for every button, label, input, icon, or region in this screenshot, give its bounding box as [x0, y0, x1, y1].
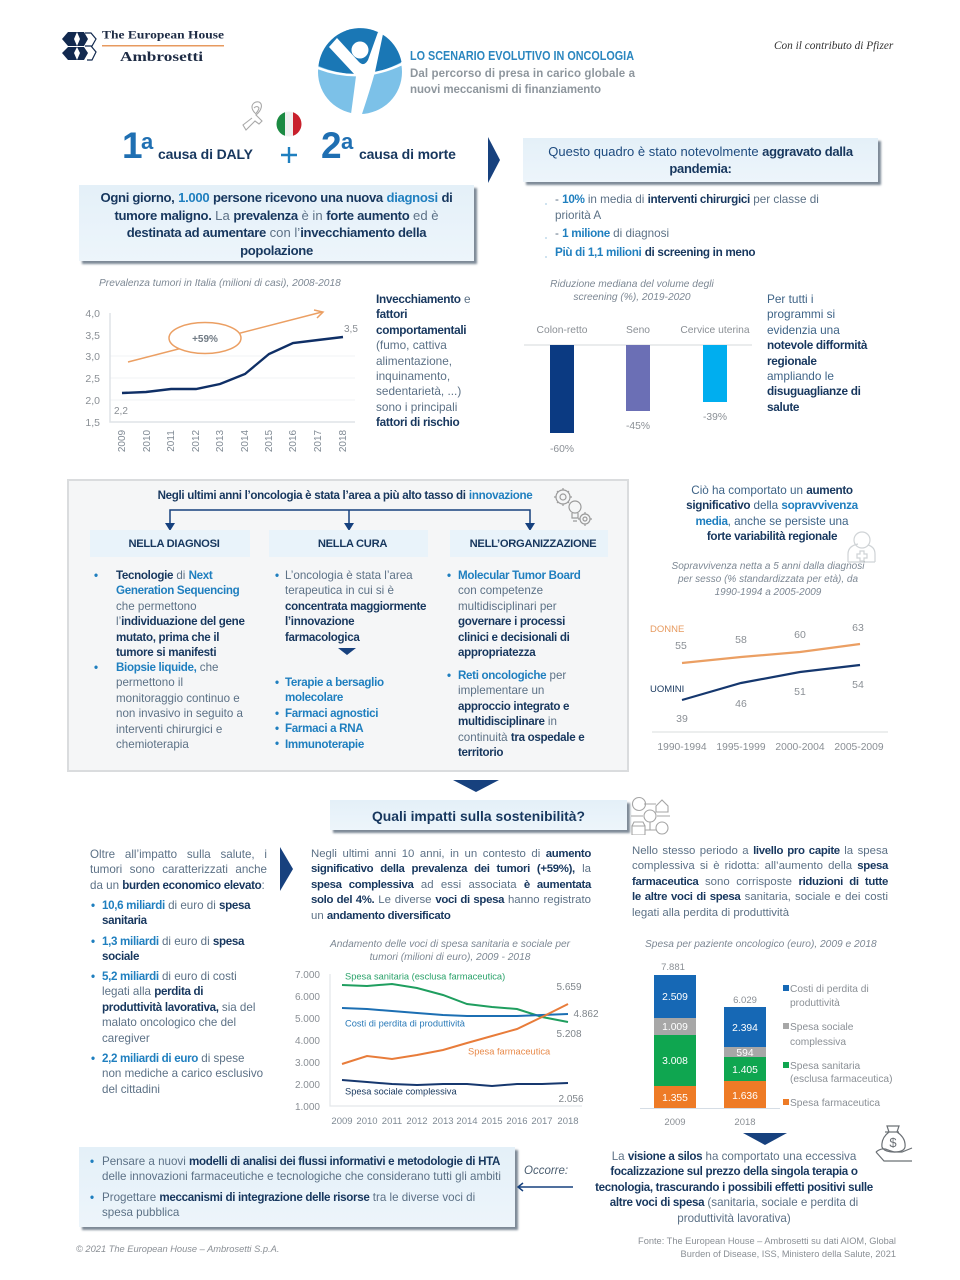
stat: second cause of death: 2 — [321, 125, 341, 166]
legend: Spesa sanitaria — [790, 1061, 861, 1072]
column: organizzazione: governare i processi — [458, 615, 565, 628]
column: organizzazione: • — [447, 669, 451, 682]
column: organizzazione: multidisciplinare in — [458, 715, 557, 728]
list: burden items: • — [91, 970, 95, 983]
panel: what is needed: Progettare meccanismi di integrazione delle risorse tra le diverse voci di — [102, 1191, 475, 1204]
column header: organizzazione: NELL’ORGANIZZAZIONE — [470, 538, 596, 550]
caption: survival chart: 1990-1994 a 2005-2009 — [715, 587, 821, 598]
chart: spending lines: Spesa sanitaria (esclusa farmaceutica) — [345, 972, 505, 982]
chart: per-patient stacked bars: 1.355 — [662, 1093, 688, 1104]
column: cura: terapeutica in cui si è — [285, 584, 394, 597]
stat: first cause of DALY: causa di DALY — [158, 146, 253, 162]
text: risk factors: comportamentali — [376, 323, 466, 337]
list: burden items: sanitaria — [102, 914, 147, 927]
column: organizzazione — [447, 569, 584, 759]
chart: prevalence line chart: 2012 — [191, 429, 202, 452]
text: risk factors: fattori — [376, 307, 407, 321]
chart: spending lines: 2018 — [557, 1116, 579, 1127]
chart: spending lines: 2016 — [506, 1116, 528, 1127]
chart: prevalence line chart: 2018 — [338, 429, 349, 452]
chart: spending lines: 1.000 — [295, 1102, 320, 1113]
panel: pandemic callout — [523, 138, 878, 182]
chart: prevalence line chart: 2,2 — [114, 406, 128, 417]
chart: per-patient stacked bars: 6.029 — [733, 995, 757, 1006]
chart: survival by sex: 54 — [852, 679, 864, 691]
chart: survival by sex: 39 — [676, 713, 688, 725]
panel: what is needed: • — [90, 1191, 94, 1204]
chart: prevalence line chart: 2013 — [215, 429, 226, 452]
stat: second cause of death: causa di morte — [359, 146, 456, 162]
panel: what is needed: spesa pubblica — [102, 1206, 179, 1219]
text: survival statement: media, anche se persiste una — [695, 515, 849, 528]
text: spending trend — [311, 848, 592, 922]
column: cura: Terapie a bersaglio — [285, 676, 384, 689]
list: burden items: 2,2 miliardi di euro di spese — [102, 1052, 244, 1065]
chart: spending lines: 2013 — [432, 1116, 454, 1127]
text: survival statement: Ciò ha comportato un aumento — [691, 484, 853, 497]
column: cura: Farmaci a RNA — [285, 722, 363, 735]
panel: daily diagnoses callout: tumore maligno. La prevalenza è in forte aumento ed è — [114, 208, 439, 222]
column: organizzazione: continuità tra ospedale e — [458, 731, 584, 744]
column: organizzazione: • — [447, 569, 451, 582]
chart: survival by sex: 46 — [735, 698, 747, 710]
column: diagnosi: permettono il — [116, 676, 183, 689]
chart: per-patient stacked bars: 2018 — [734, 1117, 756, 1128]
text: spending trend: un andamento diversificato — [311, 910, 451, 922]
text: risk factors: inquinamento, — [376, 369, 450, 383]
heading: sustainability question — [330, 800, 627, 830]
text: regional differences: disuguaglianze di — [767, 384, 861, 398]
column header: cura: NELLA CURA — [318, 538, 387, 550]
column: diagnosi: interventi chirurgici e — [116, 723, 222, 736]
chart: spending lines: 4.000 — [295, 1036, 320, 1047]
column: diagnosi: Biopsie liquide, che — [116, 661, 218, 674]
chart: prevalence line chart: 2014 — [240, 429, 251, 452]
text: per capita spending: le altre voci di spesa sanitaria, sociale e dei costi — [632, 891, 888, 903]
chart: spending lines: 2015 — [481, 1116, 503, 1127]
text: silos vision — [595, 1150, 873, 1225]
chart: per-patient stacked bars: 2.509 — [662, 992, 688, 1003]
panel: daily diagnoses callout: Ogni giorno, 1.000 persone ricevono una nuova diagnosi di — [101, 190, 452, 205]
title: report heading: Dal percorso di presa in carico globale a — [410, 68, 636, 80]
column: diagnosi: • — [94, 569, 98, 582]
text: per capita spending: Nello stesso periodo a livello pro capite la spesa — [632, 845, 888, 857]
column: diagnosi: Tecnologie di Next — [116, 569, 212, 582]
text: regional differences: Per tutti i — [767, 292, 814, 306]
text: risk factors: sedentarietà, ...) — [376, 384, 461, 398]
column: diagnosi: che permettono — [116, 600, 197, 613]
list: burden items: caregiver — [102, 1032, 150, 1045]
chart: spending lines — [295, 970, 599, 1127]
chart: spending lines: Costi di perdita di produttività — [345, 1018, 466, 1028]
chart: spending lines: 3.000 — [295, 1058, 320, 1069]
column: cura: farmacologica — [285, 631, 359, 644]
list: burden items: sociale — [102, 950, 139, 963]
chart: survival by sex: 2000-2004 — [775, 742, 825, 753]
chart: screening reduction bars — [524, 325, 752, 455]
text: regional differences: evidenzia una — [767, 323, 840, 337]
column: cura: • — [275, 569, 279, 582]
label: Occorre: Occorre: — [524, 1165, 568, 1177]
column: organizzazione: implementare un — [458, 684, 544, 697]
panel: daily diagnoses callout: popolazione — [240, 242, 313, 258]
text: spending trend: spesa complessiva ad essi associata è aumentata — [311, 879, 591, 891]
text: silos vision: focalizzazione sul prezzo della singola terapia o — [610, 1165, 858, 1178]
text: spending trend: Negli ultimi anni 10 anni, in un contesto di aumento — [311, 848, 591, 860]
text: regional differences: programmi si — [767, 307, 835, 321]
icon: people with cross — [847, 531, 876, 563]
caption: spending lines chart: Andamento delle voci di spesa sanitaria e sociale per — [330, 939, 570, 950]
chart: survival by sex: 51 — [794, 686, 806, 698]
logo: The European House Ambrosetti — [62, 28, 224, 65]
column: diagnosi: l’individuazione del gene — [116, 615, 245, 628]
stat: first cause of DALY: 1 — [122, 125, 142, 166]
text: risk factors: Invecchiamento e — [376, 292, 471, 306]
chart: survival by sex: 58 — [735, 634, 747, 646]
column: cura: • — [275, 737, 279, 750]
legend: Spesa sociale — [790, 1022, 854, 1033]
list: pandemic effects: Più di 1,1 milioni di screening in meno — [555, 246, 755, 259]
chart: per-patient stacked bars: 2.394 — [732, 1023, 758, 1034]
chart: survival by sex: 1990-1994 — [657, 742, 707, 753]
panel: innovation — [67, 479, 629, 772]
chart: prevalence line chart: 2,5 — [85, 373, 100, 385]
chart: survival by sex — [650, 622, 888, 753]
text: per capita spending — [632, 845, 888, 919]
chart: prevalence line chart — [85, 308, 358, 452]
list: burden items: del cittadini — [102, 1083, 160, 1096]
stat: first cause of DALY: a — [141, 129, 153, 154]
footer: copyright: © 2021 The European House – Ambrosetti S.p.A. — [76, 1244, 279, 1254]
chart: prevalence line chart: 3,5 — [85, 330, 100, 342]
chart: survival by sex: DONNE — [650, 624, 684, 635]
icon: gears and light bulb — [554, 488, 592, 526]
column header: cura — [269, 530, 428, 557]
list: burden items: non mediche a carico esclusivo — [102, 1067, 263, 1080]
list: burden items: 1,3 miliardi di euro di spesa — [102, 935, 244, 948]
text: survival statement — [686, 484, 858, 543]
chart: prevalence line chart: 3,5 — [344, 324, 358, 335]
chart: survival by sex: 60 — [794, 629, 806, 641]
column: cura: • — [275, 707, 279, 720]
list: pandemic effects — [545, 193, 819, 259]
column: cura: Farmaci agnostici — [285, 707, 378, 720]
chart: per-patient stacked bars: 594 — [736, 1048, 754, 1059]
chart: prevalence line chart: 3,0 — [85, 351, 100, 363]
chart: spending lines: 5.659 — [556, 982, 582, 993]
legend: produttività — [790, 998, 840, 1009]
legend: Spesa farmaceutica — [790, 1098, 880, 1109]
caption: prevalence chart: Prevalenza tumori in Italia (milioni di casi), 2008-2018 — [99, 278, 341, 289]
text: economic burden: tumori sono caratterizzati anche — [90, 863, 267, 876]
caption: survival chart: per sesso (% standardizzata per età), da — [678, 574, 858, 585]
column: organizzazione: multidisciplinari per — [458, 600, 557, 613]
icon: hand with money bag: $ — [889, 1135, 897, 1150]
text: regional differences: salute — [767, 400, 799, 414]
caption: per-patient chart: Spesa per paziente oncologico (euro), 2009 e 2018 — [645, 939, 877, 950]
chart: spending lines: 2.000 — [295, 1080, 320, 1091]
text: spending trend: significativo della prevalenza dei tumori (+59%), la — [311, 863, 591, 875]
text: risk factors: sono i principali — [376, 400, 457, 414]
chart: prevalence line chart: 2017 — [313, 429, 324, 452]
chart: spending lines: Spesa sociale complessiva — [345, 1086, 457, 1096]
text: risk factors: alimentazione, — [376, 354, 452, 368]
chart: prevalence line chart: 2015 — [264, 429, 275, 452]
text: regional differences: ampliando le — [767, 369, 834, 383]
chart: survival by sex: 63 — [852, 622, 864, 634]
logo: The European House Ambrosetti: Ambrosetti — [120, 50, 203, 65]
column header: organizzazione — [450, 530, 608, 557]
chart: survival by sex: 55 — [675, 640, 687, 652]
chart: spending lines: 2012 — [406, 1116, 428, 1127]
chart: per-patient stacked bars: 1.636 — [732, 1091, 758, 1102]
column: cura — [275, 569, 426, 751]
column: diagnosi: • — [94, 661, 98, 674]
column: cura: • — [275, 676, 279, 689]
caption: screening chart: Riduzione mediana del volume degli — [550, 279, 714, 290]
list: burden items: 5,2 miliardi di euro di costi — [102, 970, 237, 983]
chart: spending lines: 4.862 — [573, 1009, 599, 1020]
chart: spending lines: 5.208 — [556, 1029, 582, 1040]
caption: spending lines chart — [330, 939, 570, 963]
footer: source — [638, 1236, 896, 1259]
column: organizzazione: appropriatezza — [458, 646, 535, 659]
callout: +59% — [169, 322, 241, 354]
caption: screening chart: screening (%), 2019-2020 — [573, 292, 691, 303]
column: cura: L’oncologia è stata l’area — [285, 569, 413, 582]
title: report heading — [410, 49, 636, 95]
panel: what is needed: Pensare a nuovi modelli di analisi dei flussi informativi e metodologie di HTA — [102, 1155, 500, 1168]
legend — [783, 984, 892, 1109]
icon: Italian flag ball — [276, 112, 302, 136]
column: organizzazione: approccio integrato e — [458, 700, 569, 713]
text: economic burden: da un burden economico elevato: — [90, 879, 265, 892]
text: per capita spending: farmaceutica sono corrisposte riduzioni di tutte — [632, 876, 888, 888]
legend: Costi di perdita di — [790, 984, 869, 995]
list: burden items: • — [91, 1052, 95, 1065]
text: silos vision: altre voci di spesa (sanitaria, sociale e perdita di — [610, 1196, 858, 1209]
arrows: branching to three columns — [165, 509, 535, 530]
list: burden items: produttività lavorativa, sia del — [102, 1001, 255, 1014]
icon: plus sign — [281, 147, 297, 163]
icon: awareness ribbon — [242, 101, 263, 131]
icon: sustainability network — [631, 797, 670, 835]
arrow: down to silos text — [743, 1133, 787, 1145]
chart: spending lines: 6.000 — [295, 992, 320, 1003]
chart: prevalence line chart: 2010 — [142, 429, 153, 452]
column: diagnosi: Generation Sequencing — [116, 584, 239, 597]
column: diagnosi: monitoraggio continuo e — [116, 692, 240, 705]
chart: survival by sex: UOMINI — [650, 684, 684, 695]
column: diagnosi: tumore si manifesti — [116, 646, 216, 659]
heading: sustainability question: Quali impatti sulla sostenibilità? — [372, 808, 585, 824]
chart: prevalence line chart: 2009 — [117, 429, 128, 452]
text: survival statement: forte variabilità regionale — [707, 530, 837, 543]
list: burden items: • — [91, 935, 95, 948]
arrow: growth — [128, 310, 323, 362]
chart: per-patient stacked bars: 7.881 — [661, 962, 685, 973]
chart: spending lines: 2011 — [382, 1116, 402, 1127]
text: risk factors — [376, 292, 471, 429]
icon: hand with money bag — [876, 1125, 912, 1162]
chart: screening reduction bars: -60% — [550, 444, 574, 455]
text: risk factors: (fumo, cattiva — [376, 338, 447, 352]
column: organizzazione: con competenze — [458, 584, 543, 597]
text: economic burden: Oltre all’impatto sulla salute, i — [90, 848, 267, 861]
text: economic burden — [90, 848, 267, 1096]
column: organizzazione: Reti oncologiche per — [458, 669, 566, 682]
footer: source: Fonte: The European House – Ambrosetti su dati AIOM, Global — [638, 1236, 896, 1246]
column: cura: concentrata maggiormente — [285, 600, 426, 613]
chart: screening reduction bars: Cervice uterina — [680, 325, 750, 336]
callout: +59%: +59% — [192, 334, 218, 345]
column: cura: • — [275, 722, 279, 735]
column: cura: l’innovazione — [285, 615, 354, 628]
arrow: to pandemia panel — [488, 137, 500, 183]
chart: spending lines: 2009 — [331, 1116, 353, 1127]
panel: pandemic callout: Questo quadro è stato notevolmente aggravato dalla — [548, 144, 853, 159]
panel: daily diagnoses callout: destinata ad aumentare con l’invecchiamento della — [127, 225, 426, 240]
list: burden items: • — [91, 899, 95, 912]
list: pandemic effects: - 10% in media di interventi chirurgici per classe di — [555, 193, 819, 206]
credit: Pfizer contribution: Con il contributo di Pfizer — [774, 40, 893, 52]
chart: screening reduction bars: Seno — [626, 325, 650, 336]
text: regional differences: notevole difformità — [767, 338, 867, 352]
arrow: down triangle — [338, 648, 356, 655]
chart: per-patient stacked bars — [640, 962, 892, 1128]
text: per capita spending: complessiva si è ridotta: all’aumento della spesa — [632, 860, 888, 872]
chart: survival by sex: 2005-2009 — [834, 742, 884, 753]
chart: prevalence line chart: 2,0 — [85, 395, 100, 407]
text: silos vision: produttività lavorativa) — [677, 1212, 791, 1225]
chart: prevalence line chart: 2016 — [288, 429, 299, 452]
column header: diagnosi — [90, 530, 250, 557]
chart: survival by sex: 1995-1999 — [716, 742, 766, 753]
caption: survival chart — [672, 561, 865, 598]
list: burden items: malato oncologico che del — [102, 1016, 236, 1029]
chart: spending lines: 2014 — [456, 1116, 478, 1127]
arrow: to central text — [280, 847, 293, 891]
stat: first cause of DALY — [122, 125, 253, 166]
stat: second cause of death: a — [341, 129, 353, 154]
column: cura: Immunoterapie — [285, 738, 364, 751]
chart: spending lines: Spesa farmaceutica — [468, 1046, 551, 1056]
icon: oncology logo with figure — [318, 28, 402, 114]
chart: spending lines: 7.000 — [295, 970, 320, 981]
heading: innovation: Negli ultimi anni l’oncologia è stata l’area a più alto tasso di innovazione — [158, 489, 532, 502]
chart: prevalence line chart: 4,0 — [85, 308, 100, 320]
footer: source: Burden of Disease, ISS, Ministero della Salute, 2021 — [681, 1249, 896, 1259]
panel: what is needed: • — [90, 1155, 94, 1168]
chart: spending lines: 2.056 — [558, 1094, 584, 1105]
chart: screening reduction bars: -45% — [626, 421, 650, 432]
text: silos vision: La visione a silos ha comportato una eccessiva — [612, 1150, 856, 1163]
list: burden items: 10,6 miliardi di euro di spesa — [102, 899, 250, 912]
panel: what is needed — [79, 1147, 515, 1227]
chart: spending lines: 2010 — [356, 1116, 378, 1127]
caption: survival chart: Sopravvivenza netta a 5 anni dalla diagnosi — [672, 561, 864, 572]
list: pandemic effects: - 1 milione di diagnosi — [555, 227, 669, 240]
column header: diagnosi: NELLA DIAGNOSI — [128, 538, 220, 550]
text: silos vision: tecnologia, trascurando i possibili effetti positivi sulle — [595, 1181, 873, 1194]
list: burden items — [91, 899, 263, 1096]
panel: daily diagnoses callout — [79, 185, 474, 261]
legend: complessiva — [790, 1037, 846, 1048]
column: organizzazione: territorio — [458, 746, 503, 759]
column: diagnosi: chemioterapia — [116, 738, 189, 751]
column: diagnosi — [94, 569, 245, 751]
text: regional differences — [767, 292, 868, 414]
column: diagnosi: mutato, prima che il — [116, 631, 219, 644]
chart: spending lines: 5.000 — [295, 1014, 320, 1025]
chart: per-patient stacked bars: 1.009 — [662, 1022, 688, 1033]
chart: screening reduction bars: Colon-retto — [537, 325, 588, 336]
chart: prevalence line chart: 1,5 — [85, 417, 100, 429]
column: organizzazione: Molecular Tumor Board — [458, 569, 581, 582]
column: cura: molecolare — [285, 691, 343, 704]
arrow: to what is needed — [517, 1182, 573, 1192]
stat: second cause of death — [321, 125, 456, 166]
column: diagnosi: non invasivo in seguito a — [116, 707, 243, 720]
text: survival statement: significativo della sopravvivenza — [686, 499, 858, 512]
logo: The European House Ambrosetti: The European House — [102, 28, 224, 42]
chart: screening reduction bars: -39% — [703, 412, 727, 423]
text: risk factors: fattori di rischio — [376, 415, 459, 429]
caption: spending lines chart: tumori (milioni di euro), 2009 - 2018 — [370, 952, 530, 963]
text: regional differences: regionale — [767, 354, 817, 368]
chart: per-patient stacked bars: 1.405 — [732, 1065, 758, 1076]
legend: (esclusa farmaceutica) — [790, 1074, 892, 1085]
chart: spending lines: 2017 — [531, 1116, 553, 1127]
chart: prevalence line chart: 2011 — [166, 430, 177, 452]
panel: pandemic callout: pandemia: — [669, 161, 732, 176]
chart: per-patient stacked bars: 3.008 — [662, 1056, 688, 1067]
column: organizzazione: clinici e decisionali di — [458, 631, 570, 644]
text: spending trend: solo del 4%. Le diverse voci di spesa hanno registrato — [311, 894, 591, 906]
list: pandemic effects: priorità A — [555, 209, 601, 222]
panel: what is needed: delle innovazioni farmaceutiche e tecnologiche che considerano tutti gli ambiti — [102, 1170, 501, 1183]
arrow: down to sustainability — [453, 780, 499, 792]
chart: per-patient stacked bars: 2009 — [664, 1117, 686, 1128]
list: burden items: legati alla perdita di — [102, 985, 203, 998]
text: per capita spending: legati alla perdita di produttività — [632, 907, 789, 919]
caption: screening chart — [550, 279, 714, 303]
